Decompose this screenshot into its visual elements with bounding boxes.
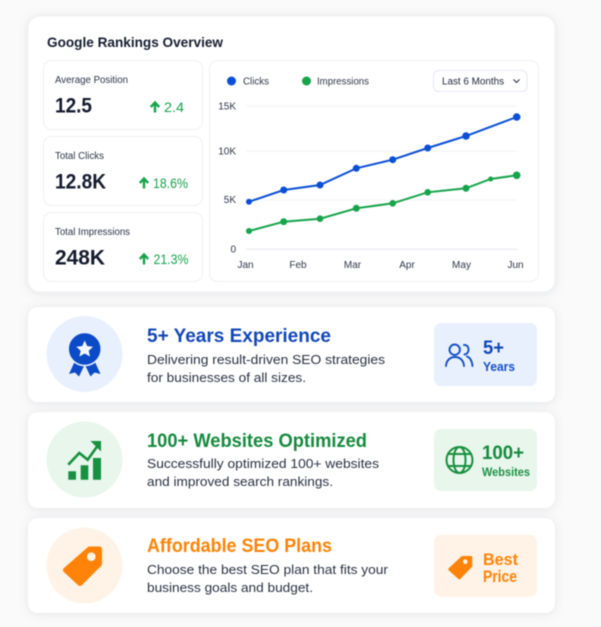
stat card: total clicks: 18.6% bbox=[153, 176, 188, 191]
stat card: average position bbox=[44, 60, 202, 130]
x axis labels: Apr bbox=[399, 260, 415, 271]
y axis labels: 5K bbox=[224, 195, 236, 206]
y axis labels: 10K bbox=[218, 146, 236, 158]
heading: 100+ Websites Optimized: 100+ Websites Optimized bbox=[147, 431, 367, 452]
icon: medal bbox=[46, 316, 122, 392]
x axis labels bbox=[237, 260, 524, 271]
legend: Clicks bbox=[243, 76, 269, 88]
badge: best price bbox=[434, 535, 537, 597]
panel: 5+ years experience bbox=[28, 307, 555, 402]
dropdown: last 6 months bbox=[434, 70, 527, 92]
badge: 5+ years bbox=[434, 323, 537, 386]
stat card: average position: Average Position bbox=[55, 75, 128, 86]
description: for businesses of all sizes. bbox=[147, 370, 306, 385]
y axis labels: 15K bbox=[218, 102, 236, 112]
badge: 100+ websites bbox=[434, 429, 537, 491]
legend bbox=[227, 76, 369, 88]
stat card: average position: 2.4 bbox=[164, 100, 185, 115]
stat card: total clicks: Total Clicks bbox=[55, 151, 104, 162]
icon: globe bbox=[446, 447, 472, 473]
badge: 100+ websites: Websites bbox=[482, 465, 530, 479]
badge: best price: Best bbox=[483, 550, 518, 569]
description bbox=[147, 456, 380, 489]
x axis labels: May bbox=[452, 260, 471, 271]
description bbox=[147, 352, 386, 385]
stat card: total impressions: 248K bbox=[55, 246, 105, 270]
heading: Google Rankings Overview: Google Rankings Overview bbox=[47, 34, 223, 50]
stat card: total impressions: Total Impressions bbox=[55, 227, 130, 238]
description: Delivering result-driven SEO strategies bbox=[147, 352, 386, 367]
panel: 100+ websites optimized bbox=[28, 412, 555, 508]
x axis labels: Feb bbox=[289, 260, 307, 271]
description: Successfully optimized 100+ websites bbox=[147, 456, 380, 471]
clicks series bbox=[246, 113, 520, 205]
badge: 5+ years: 5+ bbox=[483, 338, 504, 359]
badge: 5+ years: Years bbox=[483, 360, 515, 374]
heading: Affordable SEO Plans: Affordable SEO Plans bbox=[147, 536, 332, 557]
icon: growth chart bbox=[46, 422, 122, 498]
x axis labels: Jun bbox=[507, 260, 524, 271]
icon: small price tag bbox=[450, 558, 471, 578]
stat card: total clicks: 12.8K bbox=[55, 170, 106, 194]
line chart panel bbox=[210, 60, 538, 282]
icon: users bbox=[446, 344, 472, 366]
panel: affordable SEO plans bbox=[28, 518, 555, 613]
y axis labels: 0 bbox=[230, 244, 236, 256]
stat card: total impressions: 21.3% bbox=[154, 252, 188, 267]
stat card: total clicks bbox=[44, 136, 202, 206]
description: business goals and budget. bbox=[147, 580, 313, 595]
dropdown: last 6 months: Last 6 Months bbox=[442, 76, 504, 88]
description bbox=[147, 562, 389, 595]
legend: Impressions bbox=[317, 76, 369, 88]
description: Choose the best SEO plan that fits your bbox=[147, 562, 389, 577]
y axis labels bbox=[218, 102, 236, 256]
x axis labels: Mar bbox=[344, 260, 362, 271]
stat card: total impressions bbox=[44, 212, 202, 282]
impressions series bbox=[246, 172, 520, 234]
description: and improved search rankings. bbox=[147, 474, 333, 489]
badge: best price: Price bbox=[483, 567, 517, 586]
icon: price tag bbox=[46, 528, 122, 604]
badge: 100+ websites: 100+ bbox=[482, 443, 524, 464]
stat card: average position: 12.5 bbox=[55, 94, 92, 118]
x axis labels: Jan bbox=[237, 260, 254, 271]
heading: 5+ Years Experience: 5+ Years Experience bbox=[147, 326, 331, 347]
panel: Google rankings overview bbox=[28, 16, 555, 292]
